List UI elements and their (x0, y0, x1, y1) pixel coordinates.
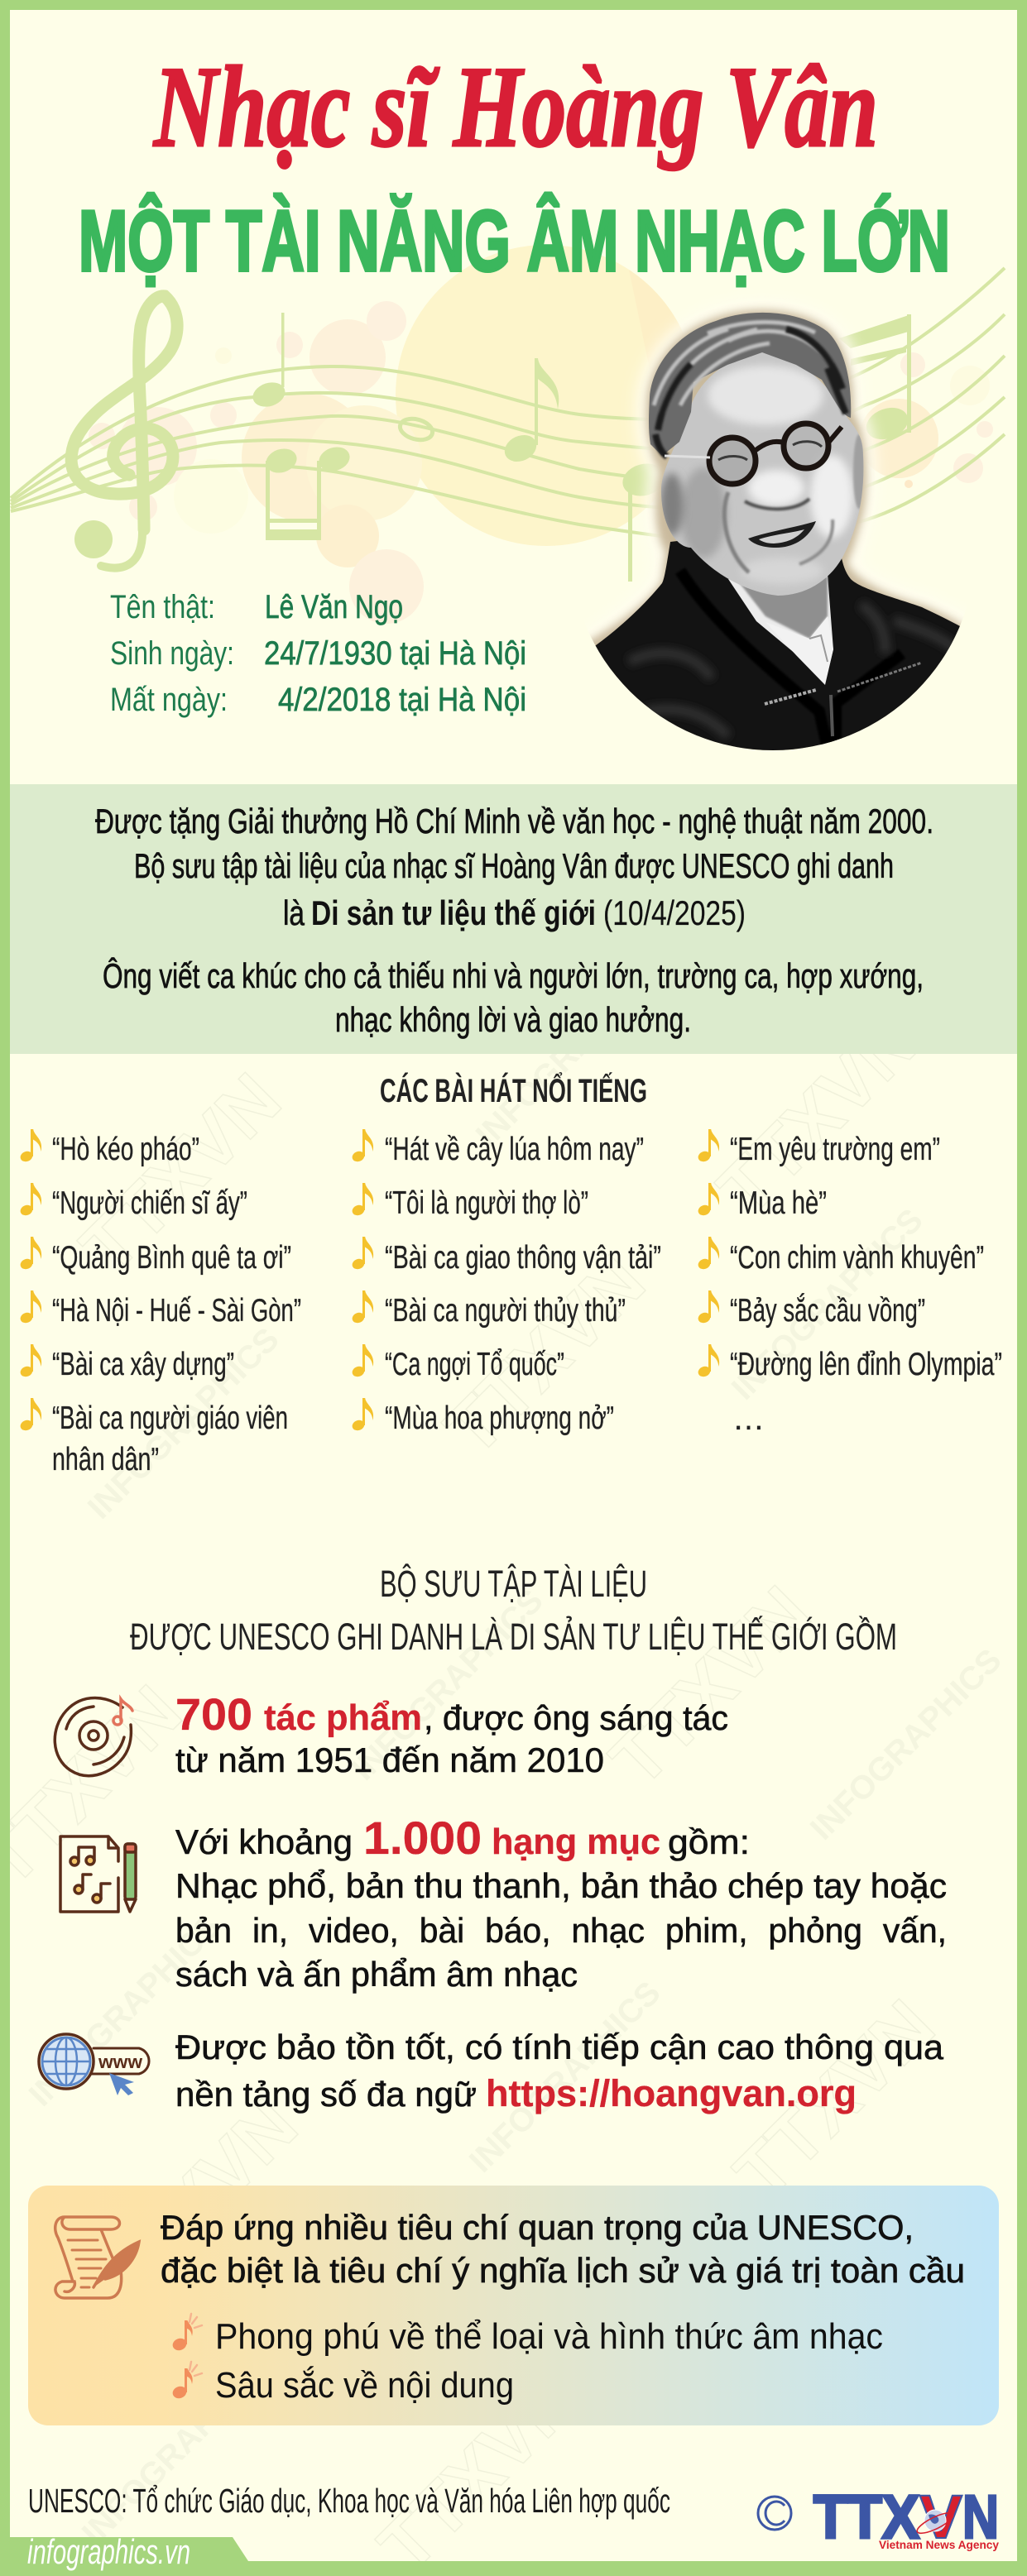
text: 1,000 items: hạng mục (492, 1822, 660, 1862)
song column 3: … (732, 1401, 765, 1437)
text: 700 works (175, 1690, 728, 1779)
face (654, 347, 869, 600)
text: INFOGRAPHICS (345, 1582, 550, 1788)
header music background (11, 245, 1005, 624)
logo globe (914, 2509, 956, 2537)
criteria heading: Đáp ứng nhiều tiêu chí quan trọng của UNESCO, (161, 2208, 914, 2247)
TTXVN logo: TTX (813, 2483, 919, 2551)
text: digital access: nền tảng số đa ngữ (175, 2075, 477, 2114)
source tab: infographics.vn (27, 2532, 190, 2571)
icon: globe with www: www (98, 2052, 143, 2072)
text: 1,000 items: 1.000 (363, 1812, 482, 1864)
song column 1: “Quảng Bình quê ta ơi” (52, 1240, 291, 1276)
text: TTXVN (82, 2084, 313, 2315)
song column 3: “Em yêu trường em” (730, 1132, 940, 1167)
criteria bullets (171, 2314, 883, 2406)
text: TTXVN (595, 1571, 826, 1802)
text: 700 works: , được ông sáng tác (424, 1698, 728, 1737)
text: 1,000 items: gồm: (668, 1822, 750, 1861)
song column 3: “Bảy sắc cầu vồng” (730, 1293, 925, 1329)
portrait of Hoàng Vân (590, 304, 962, 750)
zipper (765, 663, 922, 736)
bokeh circles (89, 245, 993, 624)
TTXVN logo: N (962, 2483, 999, 2551)
song column 2: “Tôi là người thợ lò” (385, 1185, 588, 1221)
text: TTXVN (430, 1240, 660, 1471)
text: 700 works: từ năm 1951 đến năm 2010 (175, 1740, 604, 1779)
song column 3: “Mùa hè” (730, 1185, 827, 1221)
text: 1,000 items (175, 1812, 947, 1994)
text: INFOGRAPHICS (463, 1975, 668, 2180)
song column 3 (697, 1129, 1002, 1437)
biography facts: 24/7/1930 tại Hà Nội (264, 635, 526, 672)
song column 2: “Ca ngợi Tổ quốc” (385, 1347, 564, 1382)
text: 700 works: tác phẩm (264, 1697, 422, 1738)
coat (596, 541, 960, 750)
awards text: là (283, 893, 305, 932)
song column 1: nhân dân” (52, 1442, 159, 1477)
biography facts (110, 589, 526, 718)
TTXVN logo: Vietnam News Agency (879, 2538, 999, 2551)
icon: globe with www (39, 2034, 149, 2095)
text: TTXVN (703, 1000, 933, 1231)
song column 2: “Mùa hoa phượng nở” (385, 1401, 614, 1436)
criteria bullets: Phong phú về thể loại và hình thức âm nhạc (215, 2316, 883, 2357)
treble clef (71, 296, 177, 568)
song column 1: “Hò kéo pháo” (52, 1132, 199, 1167)
song column 1: “Bài ca xây dựng” (52, 1347, 234, 1382)
text: TTXVN (719, 1985, 950, 2215)
TTXVN logo (813, 2483, 999, 2551)
song column 2 (351, 1129, 661, 1436)
song column 2: “Bài ca người thủy thủ” (385, 1293, 626, 1329)
text: INFOGRAPHICS (469, 949, 674, 1154)
criteria bullets: Sâu sắc về nội dung (215, 2365, 514, 2406)
biography facts: Mất ngày: (110, 682, 228, 718)
biography facts: 4/2/2018 tại Hà Nội (278, 682, 526, 718)
song column 1: “Hà Nội - Huế - Sài Gòn” (52, 1293, 301, 1329)
coat texture (629, 571, 960, 749)
biography facts: Sinh ngày: (110, 635, 234, 672)
heading: famous songs: CÁC BÀI HÁT NỔI TIẾNG (380, 1070, 647, 1109)
neck and collar (728, 575, 833, 685)
hair (649, 313, 851, 457)
icon: music sheet and pencil (60, 1836, 136, 1912)
song column 2: “Hát về cây lúa hôm nay” (385, 1132, 644, 1167)
text: INFOGRAPHICS (75, 2347, 281, 2552)
song list (19, 1129, 1002, 1477)
panel: UNESCO criteria (28, 2186, 999, 2425)
heading: UNESCO collection (130, 1563, 897, 1658)
panel: awards (10, 784, 1017, 1054)
icon: vinyl disc with note (55, 1697, 132, 1776)
text: digital access: Được bảo tồn tốt, có tính tiếp cận cao thông qua (175, 2028, 944, 2066)
song column 1: “Bài ca người giáo viên (52, 1401, 288, 1436)
text: INFOGRAPHICS (725, 1202, 930, 1407)
glasses (665, 424, 842, 484)
criteria heading: đặc biệt là tiêu chí ý nghĩa lịch sử và giá trị toàn cầu (161, 2251, 965, 2290)
text: 1,000 items: Nhạc phổ, bản thu thanh, bản thảo chép tay hoặc (175, 1866, 947, 1905)
smile (748, 521, 816, 548)
awards text: nhạc không lời và giao hưởng. (335, 1000, 691, 1039)
awards text: (10/4/2025) (603, 893, 746, 932)
text: INFOGRAPHICS (22, 1908, 228, 2114)
icon: scroll and quill (55, 2217, 139, 2298)
song column 1 (19, 1129, 301, 1477)
copyright symbol (758, 2497, 791, 2530)
text: 1,000 items: Với khoảng (175, 1822, 353, 1861)
song column 1: “Người chiến sĩ ấy” (52, 1185, 247, 1221)
text: 1,000 items: bản in, video, bài báo, nhạc phim, phỏng vấn, (175, 1911, 947, 1950)
TTXVN logo: V (919, 2483, 962, 2551)
song column 2: “Bài ca giao thông vận tải” (385, 1240, 661, 1276)
criteria heading (161, 2208, 965, 2290)
biography facts: Lê Văn Ngọ (265, 589, 403, 625)
staff lines (11, 268, 1005, 542)
text: TTXVN (65, 1058, 296, 1289)
biography facts: Tên thật: (110, 589, 215, 625)
text: INFOGRAPHICS (81, 1321, 286, 1526)
text: 700 works: 700 (175, 1690, 252, 1740)
text: digital access (175, 2028, 944, 2114)
text: INFOGRAPHICS (804, 1642, 1009, 1847)
text: digital access: https://hoangvan.org (486, 2072, 857, 2114)
soft halo and shadow (571, 312, 981, 761)
heading: UNESCO collection: BỘ SƯU TẬP TÀI LIỆU (380, 1563, 647, 1605)
notes on staff (250, 313, 913, 582)
text: 1,000 items: sách và ấn phẩm âm nhạc (175, 1955, 578, 1994)
awards text: Di sản tư liệu thế giới (311, 893, 596, 932)
UNESCO footnote: UNESCO: Tổ chức Giáo dục, Khoa học và Văn hóa Liên hợp quốc (28, 2482, 670, 2520)
awards text (95, 802, 933, 1039)
